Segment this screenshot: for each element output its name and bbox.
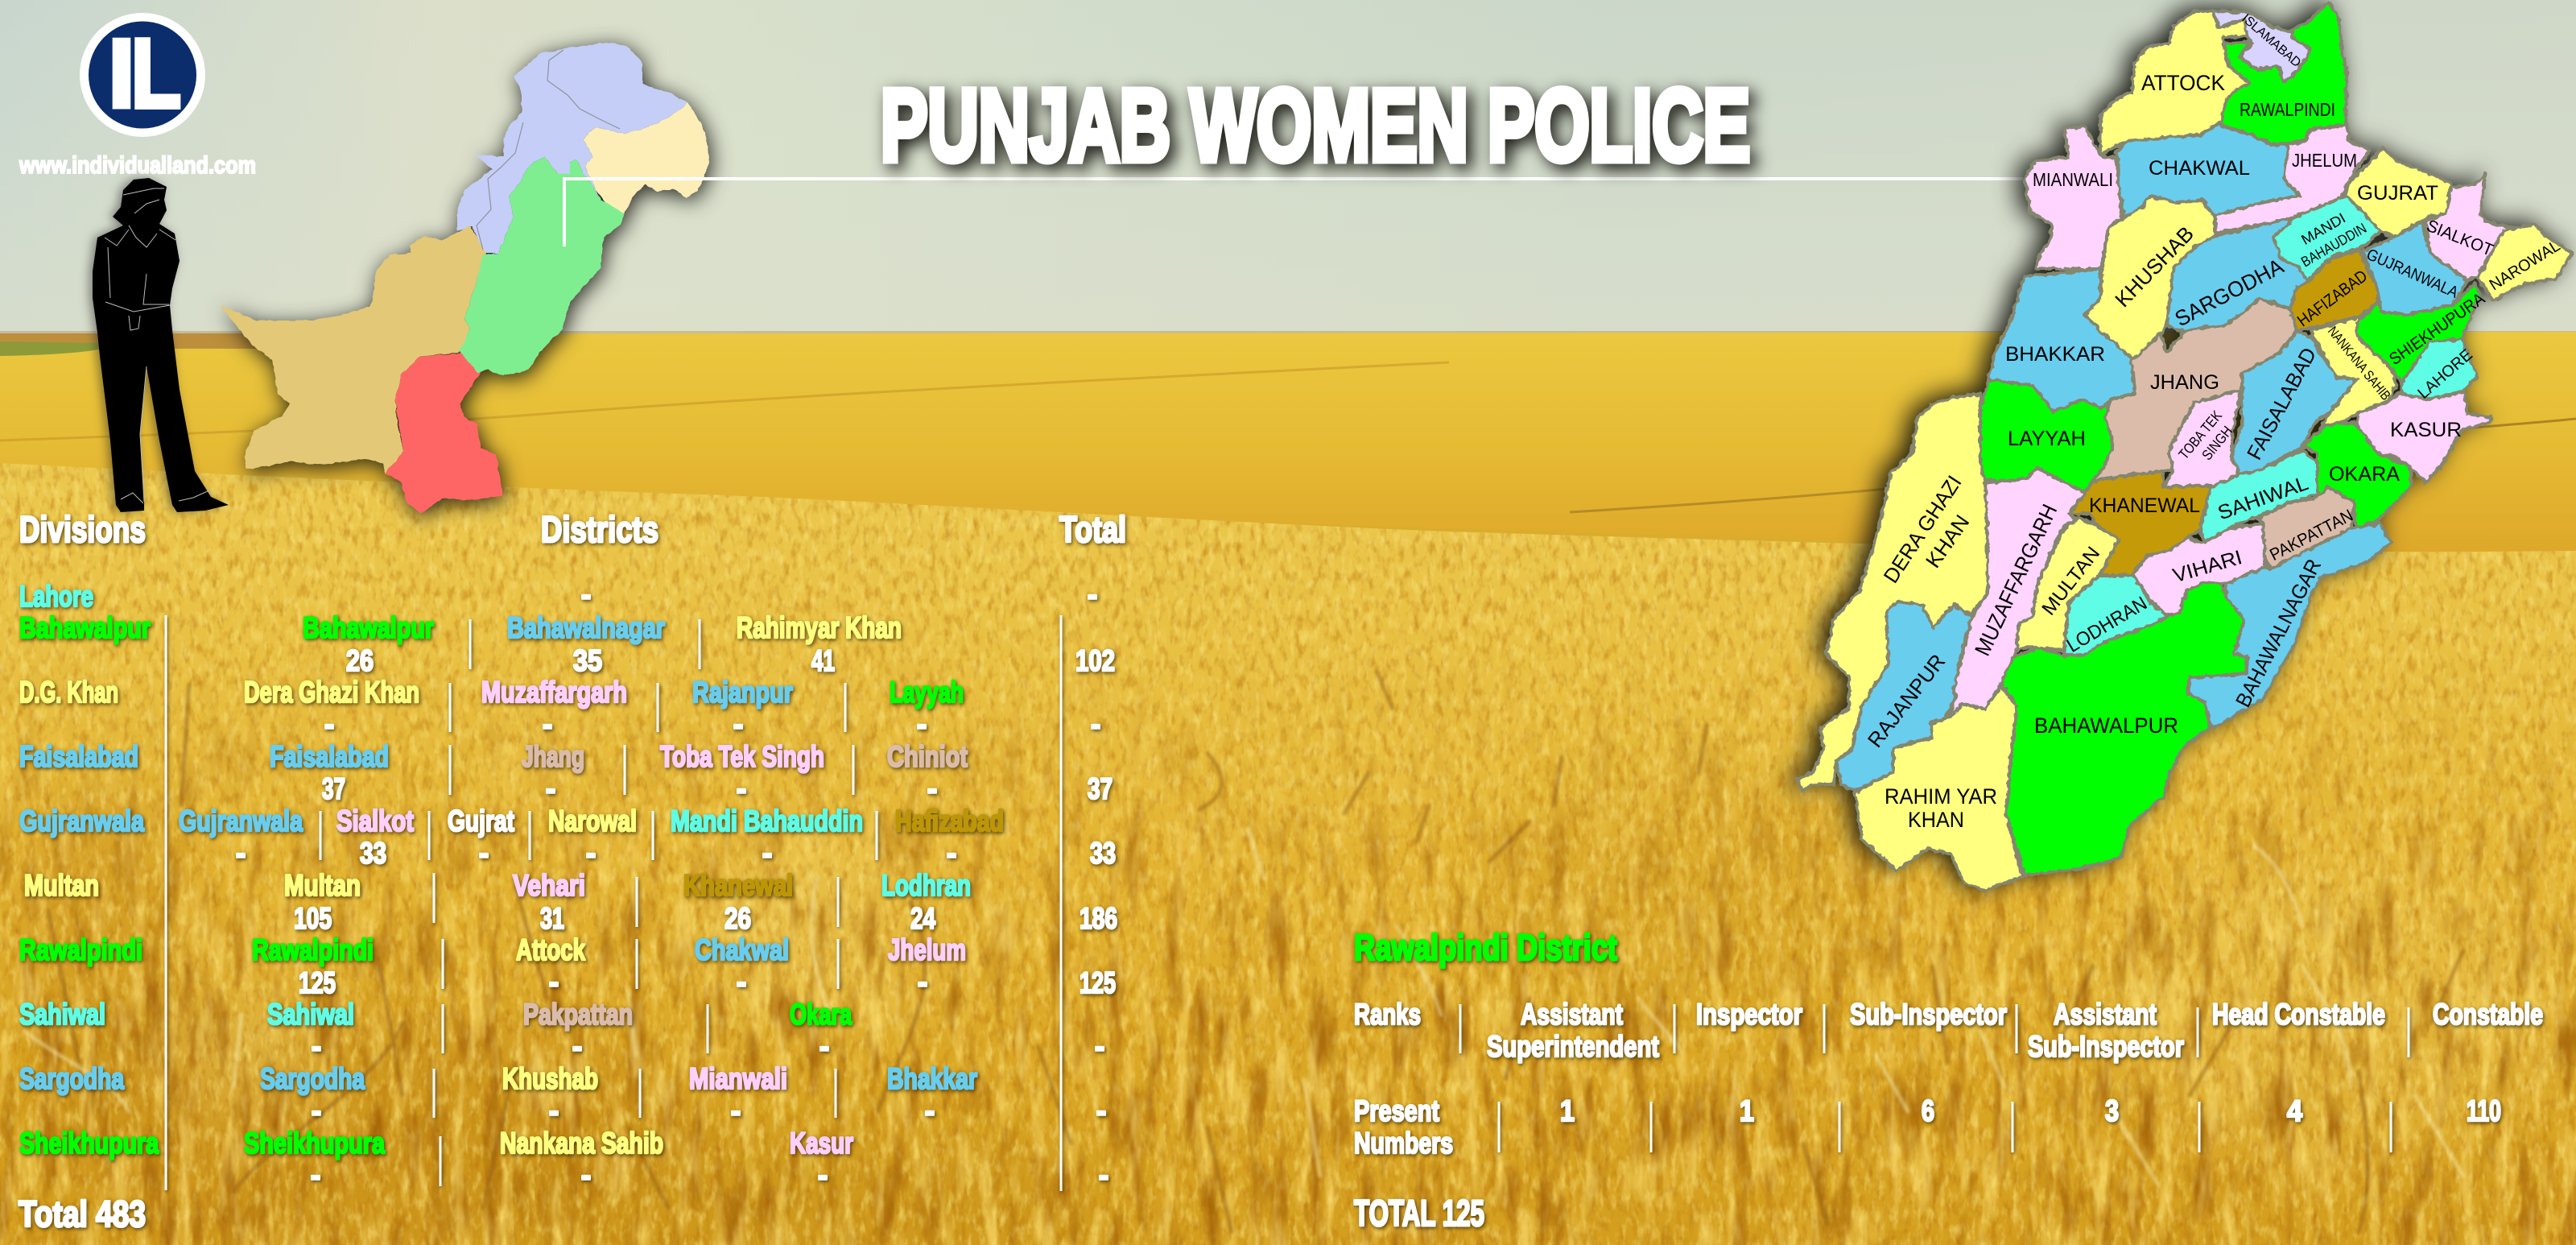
row: Sargodha: Mianwali [689,1062,787,1095]
row: Rawalpindi: Rawalpindi [19,933,142,966]
row: Gujranwala: - [236,837,246,870]
row: Lahore: - [1088,578,1097,611]
province: Azad Kashmir [583,103,709,213]
map labels: Punjab districts [1863,12,2563,832]
table frame rules [166,615,1061,1191]
district: Nankana Sahib [2310,316,2396,440]
row: Sahiwal: - [1095,1030,1104,1063]
map: Punjab districts [1797,2,2572,890]
district: Faisalabad [2231,331,2357,474]
website address: www.individualland.com [19,152,256,179]
row: Sargodha: Sargodha [19,1062,124,1095]
row: Sahiwal [19,998,1104,1063]
present numbers row: 110 [2467,1094,2501,1127]
row: Rawalpindi: 125 [1080,966,1116,999]
district: Mianwali [2025,126,2121,269]
district: Muzaffargarh [1949,468,2085,718]
column headings: Total [1059,509,1126,550]
label: Vihari: VIHARI [2170,546,2244,587]
row: Multan: Vehari [513,869,585,902]
district: Kasur [2357,391,2491,482]
row: Rawalpindi: Rawalpindi [252,933,374,966]
heading: Rawalpindi District: Rawalpindi District [1354,927,1617,968]
row: Rawalpindi: - [737,966,746,999]
label: Attock: ATTOCK [2141,71,2225,95]
district: Dera Ghazi Khan [1797,394,1988,791]
row: D.G. Khan: Layyah [890,676,964,709]
district: Khanewal [2069,471,2211,576]
row: Multan: 26 [724,902,751,935]
row: Faisalabad: Faisalabad [19,740,138,773]
district: Hafizabad [2290,250,2378,331]
district: Sargodha [2166,217,2307,352]
label: Shiekhupura: SHIEKHUPURA [2386,289,2488,369]
present numbers row: Present [1354,1094,1439,1127]
row: Gujranwala: - [762,837,772,870]
present numbers row: 4 [2287,1094,2302,1127]
label: Bahawalpur: BAHAWALPUR [2034,713,2178,738]
row: Lahore: Lahore [19,580,93,613]
label: Bahauddin: BAHAUDDIN [2298,220,2369,270]
row: Sahiwal: Pakpattan [523,998,633,1031]
label: Khan: KHAN [1908,808,1964,832]
row: Sargodha: Sargodha [260,1062,365,1095]
label: Hafizabad: HAFIZABAD [2294,267,2371,330]
district: Mandi Bahauddin [2273,196,2380,282]
district: Toba Tek Singh [2163,390,2242,487]
row: D.G. Khan: - [543,708,552,741]
row: Multan: Khanewal [683,869,793,902]
row: Sheikhupura: - [311,1159,320,1192]
province: Punjab [460,156,624,376]
row: Rawalpindi [19,933,1116,999]
row: Multan: 24 [910,902,935,935]
row: Sheikhupura [19,1127,1108,1192]
row: D.G. Khan: Dera Ghazi Khan [244,676,419,709]
label: Gujranwala: GUJRANWALA [2363,246,2461,302]
present numbers row: 1 [1560,1094,1575,1127]
row: Sheikhupura: Kasur [790,1127,853,1160]
rank headers: Ranks [1354,998,1421,1031]
label: Narowal: NAROWAL [2487,237,2563,294]
row: Multan: Lodhran [881,869,971,902]
rank headers [1354,998,2543,1063]
rank headers: Sub-Inspector [1850,998,2007,1031]
row: D.G. Khan: - [917,708,927,741]
row: Bahawalpur: Bahawalpur [19,611,151,644]
label: Khanewal: KHANEWAL [2089,494,2200,517]
label: Chakwal: CHAKWAL [2149,157,2250,180]
row: Multan: 105 [294,902,332,935]
present numbers row [1354,1094,2501,1160]
district: Pakpattan [2257,487,2355,569]
row: Rawalpindi: Jhelum [888,933,966,966]
row: Faisalabad: Faisalabad [270,740,389,773]
row: Sargodha [19,1062,1106,1127]
label: Lahore: LAHORE [2414,346,2476,403]
row: Gujranwala: Narowal [548,804,637,838]
district: Khushab [2085,196,2215,361]
row: Sargodha: - [312,1094,321,1127]
row: Rawalpindi: Chakwal [695,933,789,966]
label: Kasur: KASUR [2390,419,2462,441]
label: Nankana Sahib: NANKANA SAHIB [2325,324,2393,403]
district: Sheikhupura [2357,283,2480,383]
column headings [19,509,1126,550]
row: Multan: Multan [284,869,361,902]
label: Gujrat: GUJRAT [2357,182,2438,205]
grand total: Total 483 [19,1193,146,1235]
district: Bhakkar [1988,269,2135,412]
label: Layyah: LAYYAH [2008,426,2086,450]
district: Layyah [1980,379,2113,492]
row: Rawalpindi: Attock [516,933,585,966]
district: Sialkot [2425,174,2509,280]
connector line from Pakistan map to Punjab map [564,179,2024,246]
row: Gujranwala: 33 [1090,837,1116,870]
row: Sargodha: Khushab [502,1062,598,1095]
label: Bahawalnagar: BAHAWALNAGAR [2231,555,2326,711]
row: Bahawalpur: 41 [811,644,835,677]
rank headers: Sub-Inspector [2028,1030,2184,1063]
label: Rawalpindi: RAWALPINDI [2240,99,2335,120]
row: Gujranwala: - [586,837,596,870]
present numbers row: 3 [2105,1094,2119,1127]
total: Rawalpindi District: TOTAL 125 [1354,1193,1484,1234]
row: Bahawalpur: Rahimyar Khan [737,611,902,644]
rank headers: Superintendent [1487,1030,1659,1063]
district: Rahim Yar Khan [1855,686,2022,890]
label: Lodhran: LODHRAN [2063,593,2151,657]
label: Mandi: MANDI [2298,210,2348,248]
label: Singh: SINGH [2198,423,2235,463]
label: Dera Ghazi: DERA GHAZI [1879,471,1967,587]
row: D.G. Khan [19,676,1100,741]
row: Sheikhupura: - [1099,1159,1108,1192]
label: Sahiwal: SAHIWAL [2215,472,2311,524]
row: Lahore: - [581,578,591,611]
present numbers row: 1 [1740,1094,1754,1127]
row: Sargodha: - [925,1094,935,1127]
label: Multan: MULTAN [2037,543,2104,619]
row: Bahawalpur [19,611,1115,677]
row: Gujranwala: Sialkot [336,804,414,838]
row: Sahiwal: - [312,1030,321,1063]
background: sky [0,0,2576,346]
label: Okara: OKARA [2329,463,2400,486]
district: Sahiwal [2200,450,2318,543]
logo: Individualland: L [131,19,181,128]
label: Faisalabad: FAISALABAD [2242,343,2321,464]
row: Sahiwal: - [572,1030,582,1063]
row: Gujranwala: Mandi Bahauddin [671,804,863,838]
row: Sargodha: Bhakkar [887,1062,977,1095]
label: Khushab: KHUSHAB [2110,221,2198,312]
district: Lodhran [2064,576,2169,656]
label: Jhelum: JHELUM [2292,150,2357,171]
district: Lahore [2401,339,2478,399]
row: Sahiwal: - [819,1030,829,1063]
row: Multan: Multan [24,869,99,902]
row: D.G. Khan: D.G. Khan [19,676,118,709]
row: Gujranwala [19,804,1116,870]
label: Rahim Yar: RAHIM YAR [1885,784,1997,809]
district: Vihari [2132,523,2265,618]
row: Gujranwala: Gujrat [448,804,514,838]
row: Rawalpindi: 125 [299,966,336,999]
district: Jhelum [2213,125,2370,233]
rank headers: Constable [2433,998,2543,1031]
rank headers: Inspector [1696,998,1802,1031]
row: Multan: 31 [540,902,564,935]
table: divisions and districts [19,509,1126,1235]
row: Bahawalpur: Bahawalpur [303,611,434,644]
row: Sheikhupura: - [581,1159,591,1192]
province: Sindh [386,353,503,514]
district: Rajanpur [1836,602,1972,791]
row: Faisalabad: - [546,772,555,805]
row: Sargodha: - [1096,1094,1106,1127]
icon: policewoman silhouette [93,178,229,512]
row: Gujranwala: 33 [360,837,386,870]
row: Sheikhupura: Nankana Sahib [500,1127,663,1160]
row: Sargodha: - [549,1094,559,1127]
row: Bahawalpur: 102 [1075,644,1115,677]
row: Gujranwala: Hafizabad [895,804,1004,838]
row: Faisalabad: - [927,772,937,805]
row: D.G. Khan: Muzaffargarh [481,676,627,709]
district: Chakwal [2116,125,2299,218]
column headings: Districts [541,509,658,550]
row: D.G. Khan: - [733,708,743,741]
logo: Individualland [80,13,205,137]
label: Islamabad: ISLAMABAD [2239,12,2303,70]
district: Bahawalpur [2001,582,2247,875]
label: Pakpattan: PAKPATTAN [2267,506,2356,565]
row: Faisalabad: Chiniot [887,740,968,773]
row: Faisalabad [19,740,1113,805]
row: Sahiwal: Sahiwal [19,998,105,1031]
district: Narowal [2478,224,2572,300]
row: Sahiwal: Okara [790,998,852,1031]
background: distant wheat field [0,331,2576,564]
present numbers row: 6 [1922,1094,1934,1127]
row: Gujranwala: Gujranwala [19,804,144,838]
logo: Individualland: I [108,19,135,128]
label: Bhakkar: BHAKKAR [2005,343,2105,366]
district: Multan [2017,517,2119,651]
district: Okara [2302,422,2412,528]
district: Gujranwala [2363,221,2467,315]
present numbers row: Numbers [1354,1127,1453,1160]
column headings: Divisions [19,509,146,550]
row: Gujranwala: - [479,837,489,870]
internal agency borders [477,50,620,250]
province: Khyber Pakhtunkhwa and Gilgit [457,43,688,253]
row: Multan [24,869,1117,935]
row: Lahore [19,578,1097,613]
row: Sheikhupura: Sheikhupura [19,1127,159,1160]
label: Rajanpur: RAJANPUR [1863,649,1950,752]
rank headers: Assistant [2054,998,2157,1031]
row: Sheikhupura: Sheikhupura [244,1127,385,1160]
label: Jhang: JHANG [2150,371,2219,394]
row: Multan: 186 [1080,902,1117,935]
district: Gujrat [2347,148,2451,238]
label: Sargodha: SARGODHA [2171,254,2288,331]
province: Balochistan [221,225,485,474]
row: Bahawalpur: Bahawalnagar [507,611,665,644]
label: Khan: KHAN [1921,511,1974,573]
rank headers: Assistant [1521,998,1623,1031]
label: Mianwali: MIANWALI [2033,169,2113,190]
row: Faisalabad: Toba Tek Singh [660,740,824,773]
row: Sargodha: - [731,1094,741,1127]
district: Rawalpindi [2221,2,2347,145]
row: D.G. Khan: Rajanpur [692,676,793,709]
table: Rawalpindi District ranks [1354,927,2543,1234]
row: Faisalabad: 37 [322,772,345,805]
district: Jhang [2090,299,2297,482]
row: Bahawalpur: 35 [573,644,602,677]
district: Attock [2100,11,2250,155]
row: Rawalpindi: - [918,966,927,999]
row: Faisalabad: Jhang [522,740,584,773]
title: PUNJAB WOMEN POLICE [881,68,1750,182]
label: Sialkot: SIALKOT [2424,217,2496,260]
row: Faisalabad: 37 [1088,772,1113,805]
row: Gujranwala: Gujranwala [179,804,303,838]
label: Muzaffargarh: MUZAFFARGARH [1970,501,2062,660]
background: near wheat field with texture [0,451,2576,1245]
row: D.G. Khan: - [1091,708,1100,741]
map: Pakistan provinces [221,43,709,514]
row: Sahiwal: Sahiwal [267,998,354,1031]
district: Bahawalnagar [2187,523,2391,727]
row: Rawalpindi: - [549,966,559,999]
row: Faisalabad: - [737,772,746,805]
row: Sheikhupura: - [818,1159,828,1192]
row: Gujranwala: - [947,837,956,870]
rank headers: Head Constable [2212,998,2385,1031]
district: Islamabad [2213,11,2310,82]
row: Bahawalpur: 26 [346,644,374,677]
label: Toba Tek: TOBA TEK [2175,407,2225,462]
row: D.G. Khan: - [324,708,334,741]
